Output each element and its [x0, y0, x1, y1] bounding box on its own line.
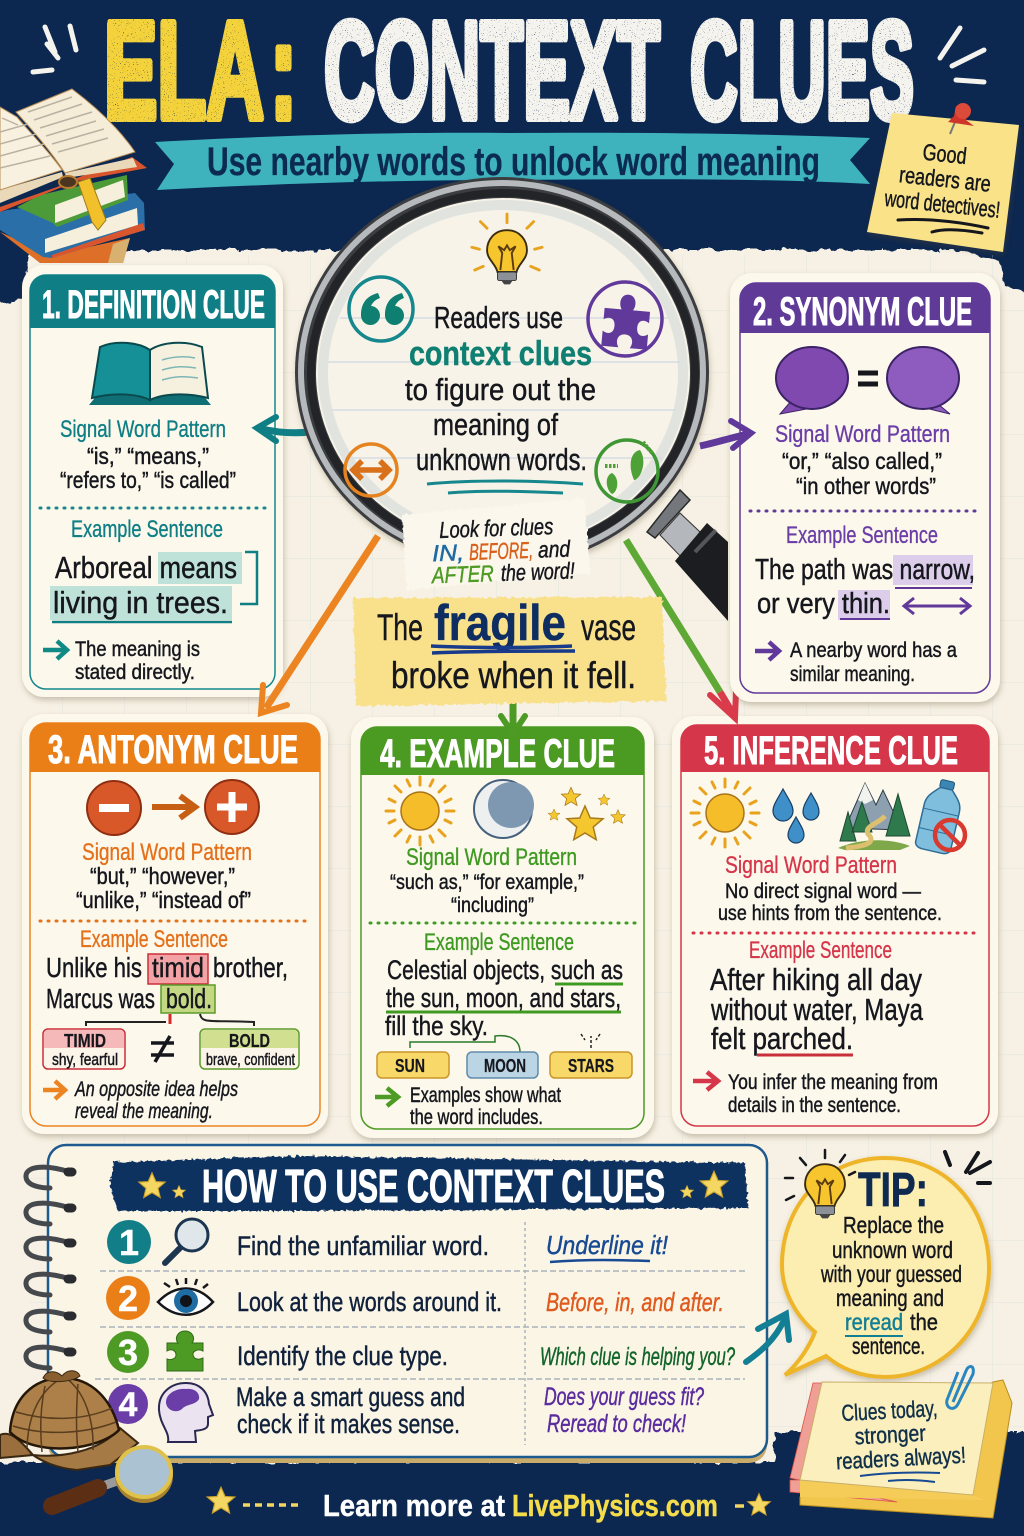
signal word pattern [60, 416, 236, 493]
lens text: unknown words. [416, 442, 587, 477]
example sentence: fill the sky. [385, 1011, 488, 1041]
signal word pattern: “unlike,” “instead of” [76, 887, 251, 913]
heading: 4. EXAMPLE CLUE [380, 732, 615, 776]
icon: two-way arrow in circle [345, 444, 397, 496]
step 3 [107, 1331, 735, 1373]
note text: Clues today, [841, 1395, 938, 1426]
card 2: synonym clue [730, 273, 1000, 702]
note: look for clues: the word! [500, 557, 576, 586]
step 4: check if it makes sense. [237, 1409, 460, 1439]
step 1: Underline it! [546, 1230, 668, 1260]
card 3: antonym clue [22, 714, 328, 1134]
lens text: context clues [409, 335, 592, 373]
step 1: Find the unfamiliar word. [237, 1231, 489, 1261]
step 3: Which clue is helping you? [540, 1343, 735, 1371]
icon: light bulb [472, 214, 542, 284]
step 3: Identify the clue type. [237, 1341, 448, 1371]
note: look for clues: Look for clues [439, 513, 554, 543]
chalk burst marks [33, 26, 984, 82]
step 4: Make a smart guess and [236, 1382, 465, 1412]
takeaway [43, 638, 200, 684]
lens text [405, 300, 596, 493]
heading banner [110, 1156, 748, 1212]
example sentence: the sun, moon, and stars, [386, 983, 621, 1013]
signal word pattern: “is,” “means,” [87, 443, 209, 469]
arrow: to definition clue [257, 417, 310, 441]
subtitle ribbon [155, 133, 870, 190]
callout: tip bubble: Replace the [843, 1212, 944, 1238]
signal word pattern [390, 844, 584, 917]
signal word pattern: “including” [451, 894, 534, 917]
example sentence: or very thin. [757, 588, 890, 620]
example sentence: Example Sentence [786, 522, 938, 549]
example sentence: Marcus was [46, 983, 155, 1014]
example sentence: Example Sentence [71, 516, 223, 543]
example sentence: timid [152, 952, 204, 983]
step 4: Reread to check! [547, 1410, 686, 1438]
label: sun: SUN [395, 1056, 425, 1076]
arrow: to tip bubble [746, 1314, 789, 1362]
icon: small magnifier [52, 1447, 173, 1506]
takeaway: similar meaning. [790, 663, 915, 686]
takeaway: details in the sentence. [728, 1094, 901, 1117]
callout: tip bubble: the [910, 1309, 938, 1335]
takeaway: Examples show what [410, 1084, 561, 1107]
note text: readers always! [835, 1442, 967, 1474]
magnifying glass [295, 177, 728, 621]
sticky note: good readers: readers are [898, 161, 992, 197]
arrow: to synonym clue [700, 421, 751, 448]
icon: equal speech bubbles [776, 347, 959, 414]
note: fragile sentence: fragile [434, 595, 566, 651]
example sentence: Arboreal means [55, 550, 237, 585]
signal word pattern: Signal Word Pattern [60, 416, 226, 443]
signal word pattern: No direct signal word — [725, 880, 921, 903]
note text: stronger [854, 1420, 927, 1449]
takeaway: A nearby word has a [790, 639, 957, 662]
callout: tip bubble: sentence. [852, 1333, 925, 1359]
icon: book stack [0, 89, 147, 263]
example sentence [46, 926, 288, 1026]
example sentence: living in trees. [53, 585, 228, 620]
heading: 3. ANTONYM CLUE [48, 728, 298, 772]
lens text: to figure out the [405, 372, 596, 407]
example sentence: Example Sentence [749, 937, 892, 964]
grid paper background [0, 250, 1024, 1462]
note: fragile sentence: The [377, 607, 423, 648]
heading banner: HOW TO USE CONTEXT CLUES [202, 1160, 665, 1212]
signal word pattern: “but,” “however,” [90, 863, 235, 889]
example sentence [710, 937, 924, 1056]
note: look for clues [402, 498, 590, 590]
icon: detective hat [0, 1371, 138, 1470]
not equal sign [151, 1036, 174, 1062]
note: look for clues: IN, [432, 539, 465, 566]
step 2 [106, 1276, 724, 1320]
takeaway [375, 1084, 561, 1129]
callout: tip bubble: TIP: [858, 1164, 928, 1217]
note: look for clues: BEFORE, [469, 537, 533, 565]
footer [207, 1487, 770, 1523]
signal word pattern: Signal Word Pattern [82, 839, 252, 866]
example sentence [50, 516, 257, 622]
step 4 [108, 1382, 704, 1442]
example sentence [385, 929, 623, 1052]
icon: puzzle piece [167, 1331, 203, 1371]
lens text: Readers use [434, 300, 563, 335]
example sentence: After hiking all day [710, 962, 922, 997]
signal word pattern: “in other words” [796, 473, 936, 499]
note: look for clues: AFTER [430, 560, 494, 588]
lens text: meaning of [433, 407, 558, 442]
takeaway: reveal the meaning. [75, 1100, 213, 1123]
sticky note: good readers [867, 103, 1019, 252]
example sentence: Unlike his [46, 952, 142, 983]
signal word pattern: “such as,” “for example,” [390, 871, 584, 894]
signal word pattern [718, 852, 942, 925]
takeaway [755, 639, 957, 686]
icon: puzzle piece in circle [588, 282, 662, 356]
label: bold: brave, confident [206, 1050, 295, 1069]
note: fragile sentence [353, 595, 666, 706]
signal word pattern: “refers to,” “is called” [60, 467, 236, 493]
footer: Learn more at [323, 1488, 505, 1523]
card 5: inference clue [672, 716, 998, 1134]
icon: quotation marks [349, 277, 413, 341]
icons: sun, drops, mountains, no water bottle [691, 777, 966, 855]
signal word pattern: “or,” “also called,” [782, 448, 942, 474]
step 1 [107, 1219, 668, 1264]
callout: tip bubble [782, 1150, 990, 1377]
label: timid: TIMID [64, 1031, 106, 1051]
note text [833, 1394, 967, 1474]
label: timid: shy, fearful [52, 1050, 118, 1069]
sticky note: good readers: Good [921, 139, 968, 169]
icon: minus to plus [87, 780, 259, 835]
note: look for clues: and [538, 535, 571, 563]
signal word pattern: Signal Word Pattern [775, 421, 950, 448]
arrow: down to example clue [501, 697, 525, 734]
takeaway: stated directly. [75, 661, 195, 684]
label: stars [550, 1034, 632, 1078]
example sentence: brother, [213, 952, 288, 983]
label: sun [377, 1052, 449, 1078]
subtitle ribbon: Use nearby words to unlock word meaning [207, 140, 820, 184]
callout: tip bubble: meaning and [836, 1285, 944, 1311]
label: timid [43, 1029, 125, 1069]
label: moon [467, 1052, 538, 1078]
callout: tip bubble: with your guessed [820, 1261, 962, 1287]
callout: tip bubble: reread [845, 1309, 903, 1335]
example sentence: Example Sentence [424, 929, 574, 956]
handle [647, 490, 728, 621]
example sentence: The path was narrow, [755, 554, 975, 586]
icon: open book [89, 343, 211, 405]
takeaway: You infer the meaning from [728, 1071, 938, 1094]
takeaway: the word includes. [410, 1106, 543, 1129]
icon: footprints in circle [596, 440, 658, 502]
signal word pattern: Signal Word Pattern [725, 852, 897, 879]
example sentence: Example Sentence [80, 926, 228, 953]
card 1: definition clue [22, 265, 283, 697]
panel: how to use context clues [48, 1145, 767, 1463]
card 4: example clue [351, 717, 654, 1138]
signal word pattern [76, 839, 252, 913]
icon: eye [158, 1278, 213, 1315]
icons: sun, moon and stars [386, 777, 625, 845]
label: stars: STARS [568, 1056, 614, 1076]
signal word pattern [775, 421, 950, 499]
icon: head with brain [159, 1383, 213, 1442]
heading: 1. DEFINITION CLUE [42, 283, 265, 327]
sticky note stack [790, 1366, 1012, 1518]
arrow: to inference clue [626, 540, 736, 718]
step 4: 4 [119, 1386, 138, 1424]
signal word pattern: Signal Word Pattern [406, 844, 577, 871]
takeaway [43, 1078, 238, 1123]
example sentence [755, 522, 975, 620]
example sentence: without water, Maya [710, 992, 924, 1027]
step 2: 2 [118, 1278, 138, 1319]
note: fragile sentence: vase [581, 607, 636, 648]
example sentence: Celestial objects, such as [387, 955, 623, 985]
label: bold: BOLD [229, 1031, 270, 1051]
spiral binding [26, 1167, 72, 1368]
footer: LivePhysics.com [512, 1488, 718, 1523]
label: moon: MOON [484, 1056, 526, 1076]
icon: paperclip [947, 1366, 973, 1408]
step 3: 3 [118, 1332, 138, 1373]
icon: tip light bulb [785, 1150, 855, 1218]
icon: red push pin [948, 103, 974, 134]
takeaway: An opposite idea helps [73, 1078, 238, 1101]
callout: tip bubble: unknown word [832, 1237, 953, 1263]
example sentence: bold. [166, 983, 212, 1014]
title [104, 0, 914, 148]
takeaway: The meaning is [75, 638, 200, 661]
step 1: 1 [119, 1222, 139, 1263]
step 4: Does your guess fit? [544, 1383, 704, 1411]
label: bold [200, 1029, 299, 1069]
takeaway [693, 1071, 938, 1117]
icon: magnifier [165, 1219, 208, 1263]
arrow: to antonym clue [261, 536, 378, 713]
signal word pattern: use hints from the sentence. [718, 902, 942, 925]
step 2: Look at the words around it. [237, 1287, 502, 1317]
example sentence: felt parched. [711, 1021, 853, 1056]
note: fragile sentence: broke when it fell. [391, 655, 636, 696]
step 2: Before, in, and after. [546, 1287, 724, 1317]
